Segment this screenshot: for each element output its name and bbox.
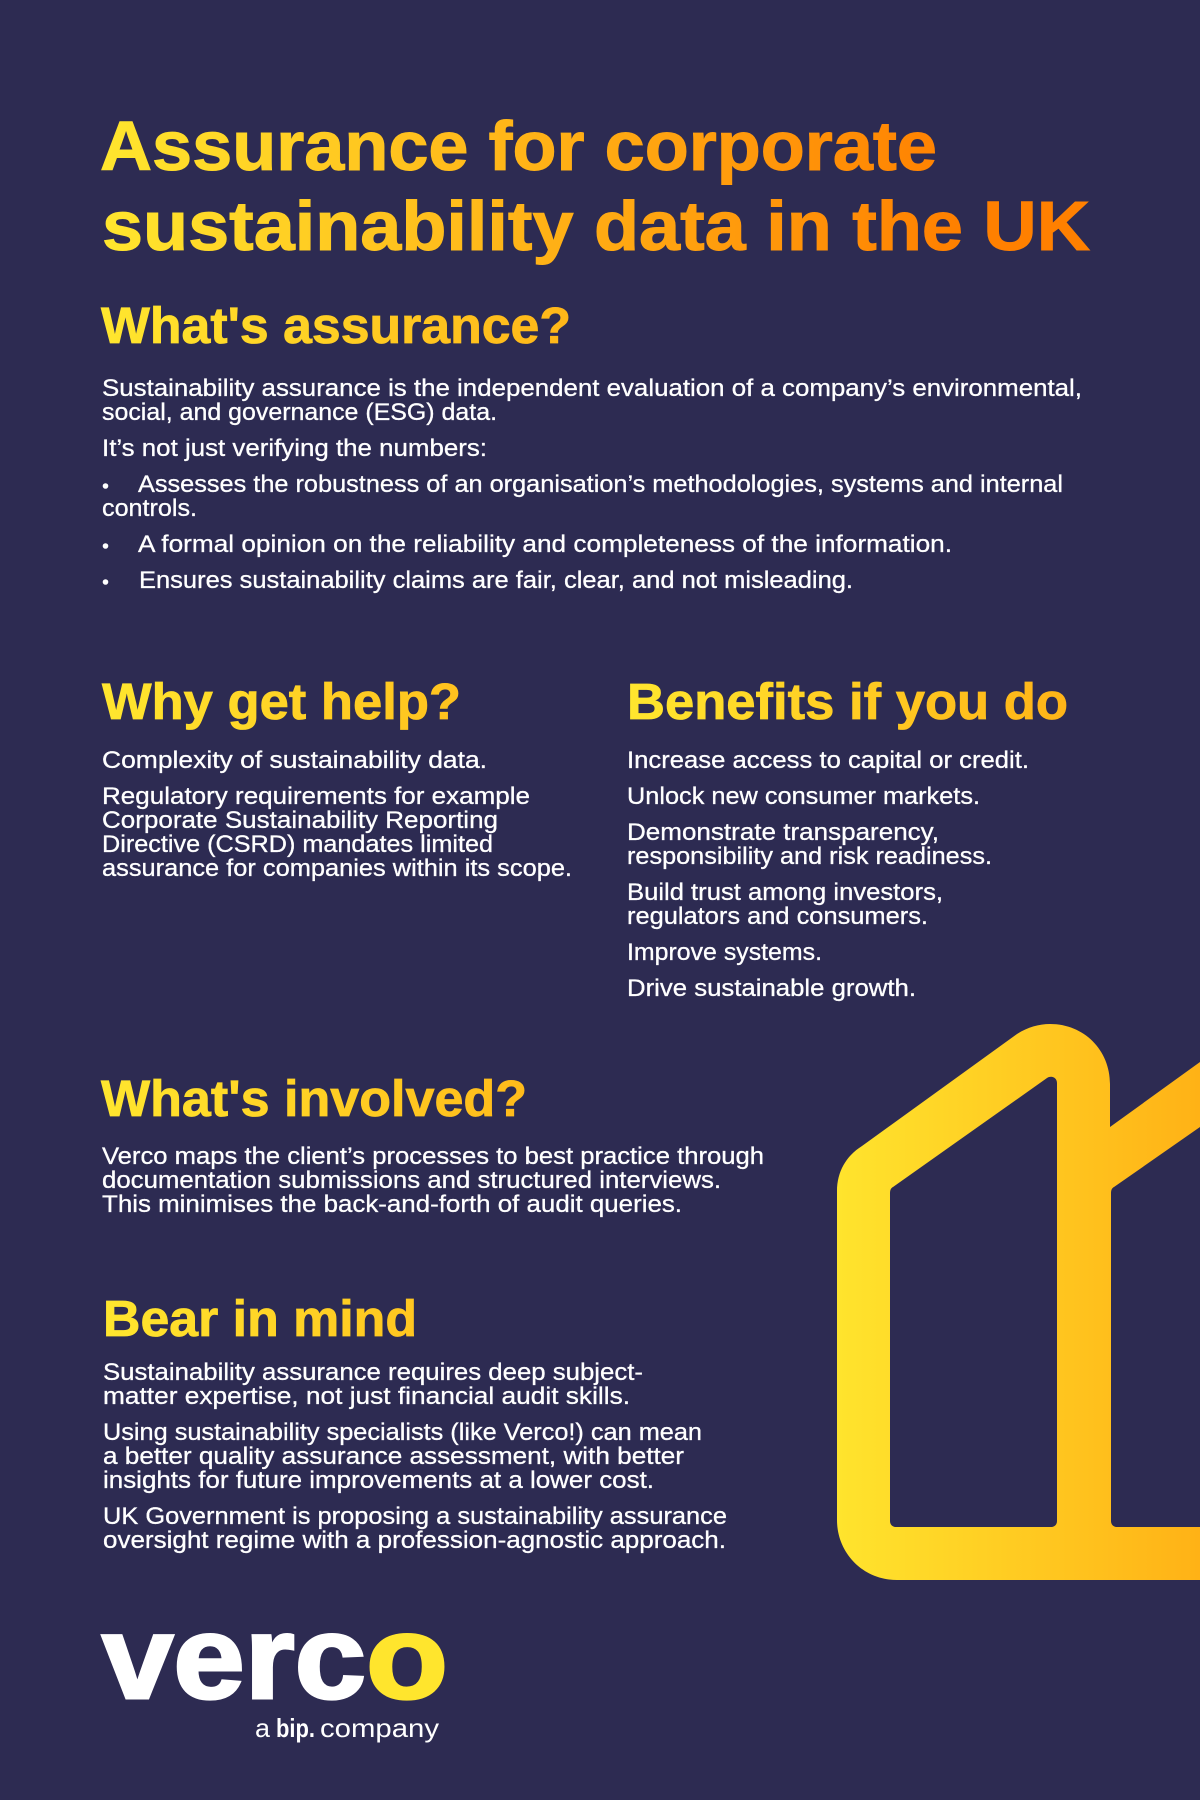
heading: what's assurance: What's assurance? [101, 297, 571, 354]
heading: bear in mind: Bear in mind [103, 1290, 417, 1347]
panel: why get help [102, 673, 572, 882]
heading: what's involved: What's involved? [101, 1070, 527, 1127]
text block: why get help: Regulatory requirements for example [102, 783, 530, 810]
text block: benefits list [627, 747, 1029, 1002]
text block: benefits list: Build trust among investors, [627, 879, 943, 906]
text block: why get help: assurance for companies within its scope. [102, 855, 572, 882]
panel: bear in mind [103, 1290, 727, 1554]
heading: why get help: Why get help? [102, 673, 461, 730]
logo tagline: company [320, 1713, 439, 1743]
list: assurance bullets: A formal opinion on the reliability and completeness of the information. [138, 531, 952, 558]
text block: assurance definition: Sustainability assurance is the independent evaluation of a company’s environmental, [102, 375, 1082, 402]
text block: what's involved [102, 1143, 764, 1218]
text block: benefits list: Demonstrate transparency, [627, 819, 939, 846]
text block: bear in mind: Using sustainability specialists (like Verco!) can mean [103, 1419, 702, 1446]
text block: what's involved: Verco maps the client’s processes to best practice through [102, 1143, 764, 1170]
text block: assurance definition: It’s not just verifying the numbers: [102, 435, 487, 462]
logo tagline: bip. [276, 1713, 315, 1743]
list: assurance bullets: Assesses the robustness of an organisation’s methodologies, systems and internal [138, 471, 1063, 498]
list: assurance bullets [102, 471, 1063, 594]
text block: bear in mind: matter expertise, not just financial audit skills. [103, 1383, 630, 1410]
text block: why get help: Complexity of sustainability data. [102, 747, 487, 774]
title: Assurance for corporate [100, 107, 937, 185]
text block: assurance definition [102, 375, 1082, 462]
text block: why get help: Directive (CSRD) mandates limited [102, 831, 493, 858]
text block: why get help: Corporate Sustainability Reporting [102, 807, 498, 834]
text block: bear in mind: a better quality assurance assessment, with better [103, 1443, 684, 1470]
logo: verco [102, 1592, 448, 1743]
heading: benefits: Benefits if you do [627, 673, 1068, 730]
list: assurance bullets: controls. [102, 495, 197, 522]
text block: benefits list: responsibility and risk readiness. [627, 843, 992, 870]
logo tagline: a [255, 1713, 271, 1743]
text block: why get help [102, 747, 572, 882]
panel: what's involved [101, 1070, 764, 1218]
text block: benefits list: Drive sustainable growth. [627, 975, 916, 1002]
text block: bear in mind: insights for future improvements at a lower cost. [103, 1467, 654, 1494]
text block: bear in mind [103, 1359, 727, 1554]
text block: benefits list: Unlock new consumer markets. [627, 783, 980, 810]
text block: benefits list: regulators and consumers. [627, 903, 928, 930]
text block: what's involved: This minimises the back-and-forth of audit queries. [102, 1191, 682, 1218]
text block: benefits list: Increase access to capital or credit. [627, 747, 1029, 774]
text block: benefits list: Improve systems. [627, 939, 822, 966]
panel: what's assurance [101, 297, 1082, 594]
text block: bear in mind: Sustainability assurance requires deep subject- [103, 1359, 643, 1386]
text block: bear in mind: UK Government is proposing a sustainability assurance [103, 1503, 727, 1530]
logo wordmark: verc [102, 1592, 366, 1724]
list: assurance bullets: Ensures sustainability claims are fair, clear, and not misleading. [139, 567, 853, 594]
title: sustainability data in the UK [102, 187, 1090, 265]
title [100, 107, 1090, 265]
text block: assurance definition: social, and governance (ESG) data. [102, 399, 497, 426]
text block: what's involved: documentation submissions and structured interviews. [102, 1167, 721, 1194]
text block: bear in mind: oversight regime with a profession-agnostic approach. [103, 1527, 726, 1554]
logo wordmark: o [366, 1592, 448, 1724]
panel: benefits if you do [627, 673, 1068, 1002]
logo tagline [255, 1713, 439, 1743]
icon: building outline [837, 1024, 1200, 1580]
